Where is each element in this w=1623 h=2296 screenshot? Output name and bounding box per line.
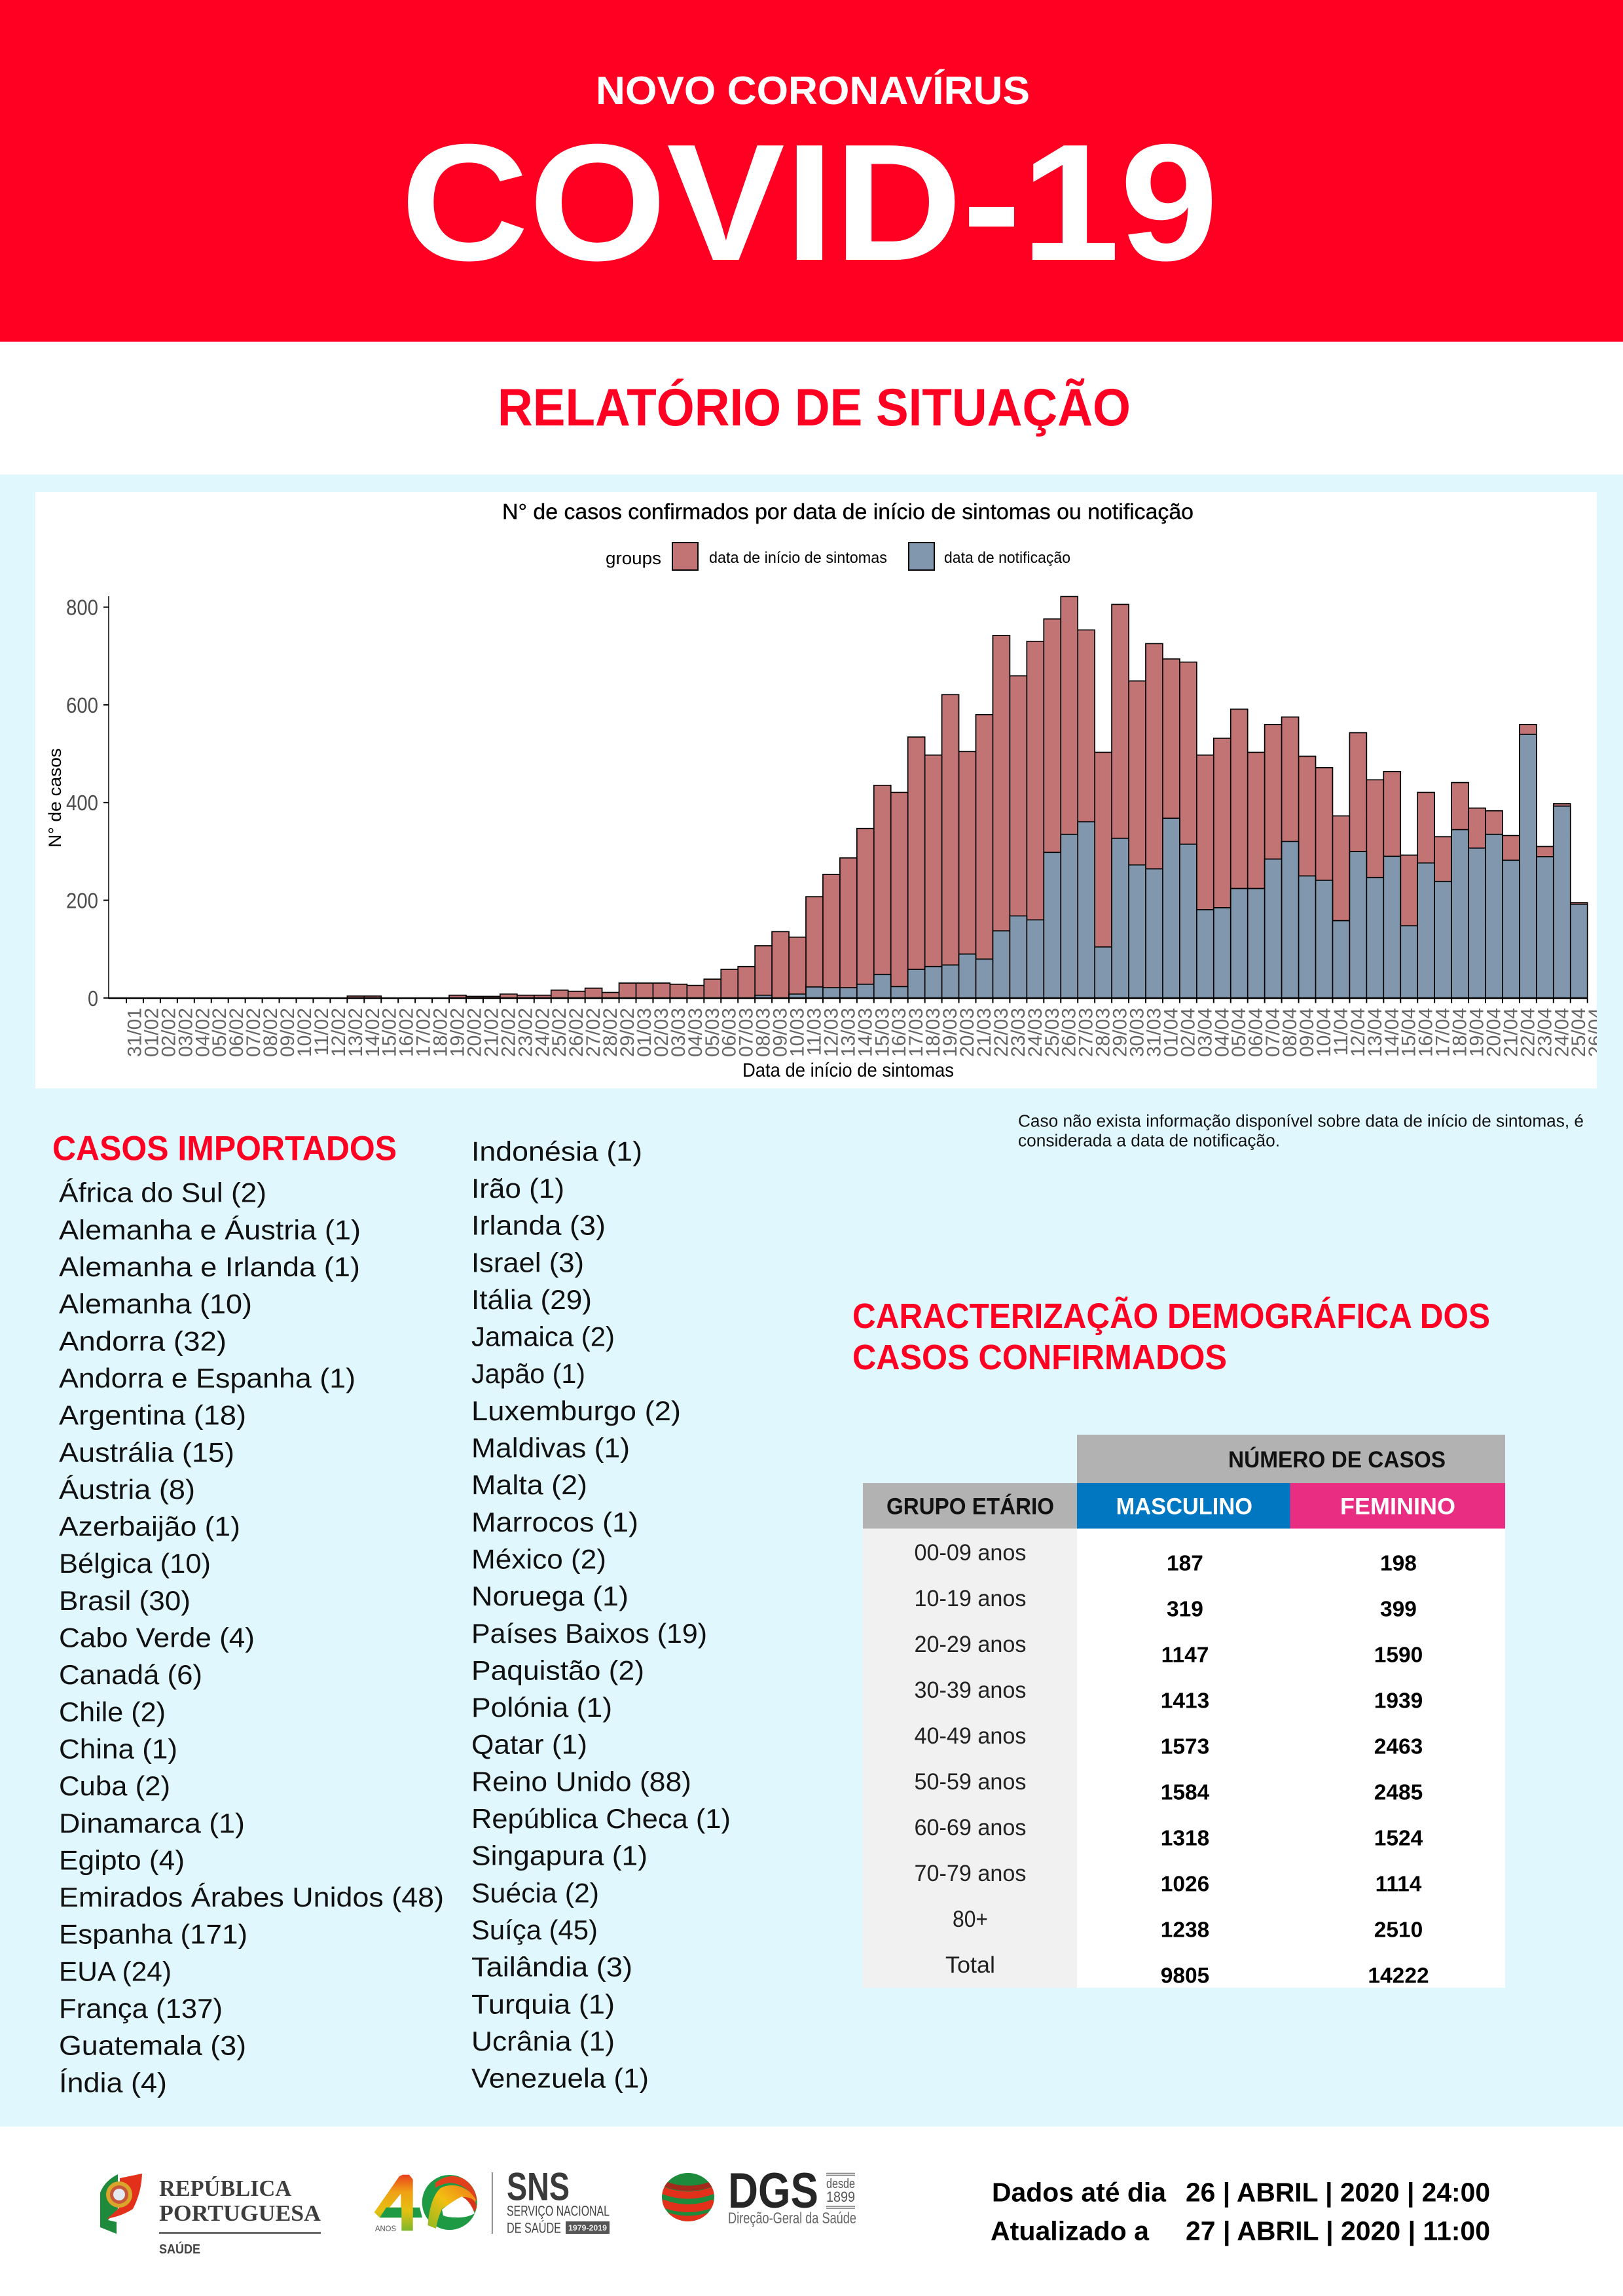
list: imported cases column 1: Bélgica (10) <box>59 1548 211 1579</box>
x axis date labels: 15/04 <box>1398 1008 1420 1057</box>
male case counts: 1318 <box>1161 1827 1209 1851</box>
x axis date labels: 06/02 <box>226 1008 247 1057</box>
footer: data dates <box>991 2177 1490 2246</box>
x axis date labels: 22/02 <box>498 1008 519 1057</box>
age group labels: 70-79 anos <box>914 1861 1027 1886</box>
x axis date labels: 01/02 <box>141 1008 162 1057</box>
x axis date labels: 03/04 <box>1194 1008 1216 1057</box>
axes <box>103 596 1590 1001</box>
bars: data de início de sintomas <box>347 596 1588 998</box>
list: imported cases column 2: Irlanda (3) <box>471 1210 606 1241</box>
list: imported cases column 2: México (2) <box>471 1543 606 1575</box>
age group labels: 10-19 anos <box>914 1586 1027 1611</box>
footnote: considerada a data de notificação. <box>1018 1132 1280 1151</box>
list: imported cases column 2: Maldivas (1) <box>471 1432 630 1463</box>
male case counts: 187 <box>1167 1552 1203 1576</box>
x axis date labels: 26/04 <box>1585 1008 1607 1057</box>
list: imported cases column 2: Ucrânia (1) <box>471 2026 615 2056</box>
female case counts <box>1368 1552 1429 1988</box>
x axis date labels: 16/03 <box>888 1008 910 1057</box>
footer: data dates: Atualizado a <box>991 2215 1150 2246</box>
x axis date labels: 30/03 <box>1127 1008 1148 1057</box>
x axis date labels: 19/02 <box>447 1008 469 1057</box>
page background: light blue band <box>0 475 1623 2126</box>
bars: data de notificação <box>755 734 1588 998</box>
female case counts: 1939 <box>1374 1689 1423 1713</box>
female case counts: 2510 <box>1374 1918 1423 1943</box>
age group labels: 40-49 anos <box>914 1723 1027 1749</box>
x axis date labels: 29/03 <box>1110 1008 1131 1057</box>
x axis date labels: 14/04 <box>1381 1008 1403 1057</box>
list: imported cases column 1: África do Sul (2) <box>59 1177 266 1208</box>
footnote: Caso não exista informação disponível sobre data de início de sintomas, é <box>1018 1113 1584 1131</box>
list: imported cases column 2: Irão (1) <box>471 1173 564 1204</box>
list: imported cases column 2: Japão (1) <box>471 1358 585 1389</box>
list: imported cases column 2: Países Baixos (19) <box>471 1618 707 1649</box>
logo: República Portuguesa: PORTUGUESA <box>159 2200 321 2226</box>
list: imported cases column 1: Alemanha (10) <box>59 1289 252 1319</box>
list: imported cases column 1: Chile (2) <box>59 1696 166 1727</box>
x axis date labels: 10/03 <box>787 1008 809 1057</box>
female case counts: 399 <box>1380 1598 1417 1622</box>
logo: SNS 40 anos: SERVIÇO NACIONAL <box>507 2203 610 2219</box>
male case counts: 319 <box>1167 1598 1203 1622</box>
x axis date labels: 22/04 <box>1517 1008 1539 1057</box>
x axis date labels: 14/03 <box>854 1008 876 1057</box>
list: imported cases column 1: Emirados Árabes Unidos (48) <box>59 1882 444 1912</box>
x axis date labels: 10/02 <box>294 1008 316 1057</box>
header: red banner <box>0 0 1623 342</box>
male case counts: 1238 <box>1161 1918 1209 1943</box>
list: imported cases column 1: Alemanha e Irlanda (1) <box>59 1251 360 1282</box>
male case counts: 1026 <box>1161 1873 1209 1897</box>
list: imported cases column 2: Marrocos (1) <box>471 1507 638 1537</box>
list: imported cases column 2: Tailândia (3) <box>471 1952 632 1982</box>
male case counts: 1413 <box>1161 1689 1209 1713</box>
x axis date labels: 05/02 <box>209 1008 230 1057</box>
x axis date labels: 18/03 <box>922 1008 944 1057</box>
x axis date labels: 11/03 <box>804 1008 825 1056</box>
logo: SNS 40 anos: DE SAÚDE <box>507 2220 561 2236</box>
x axis date labels: 25/03 <box>1042 1008 1063 1057</box>
x axis date labels <box>124 1008 1607 1057</box>
x axis title: Data de início de sintomas <box>742 1060 954 1081</box>
x axis date labels: 11/02 <box>311 1008 333 1056</box>
male case counts: 1147 <box>1161 1643 1209 1668</box>
list: imported cases column 1: França (137) <box>59 1993 223 2024</box>
list: imported cases column 2: Israel (3) <box>471 1247 584 1278</box>
list: imported cases column 2: Paquistão (2) <box>471 1655 644 1685</box>
main title: COVID-19: COVID-19 <box>401 109 1218 295</box>
x axis date labels: 19/04 <box>1467 1008 1488 1057</box>
x axis date labels: 03/03 <box>668 1008 689 1057</box>
female case counts: 198 <box>1380 1552 1417 1576</box>
x axis date labels: 25/02 <box>549 1008 570 1057</box>
female case counts: 14222 <box>1368 1964 1429 1988</box>
y axis title: N° de casos <box>45 748 65 848</box>
female case counts: 2485 <box>1374 1781 1423 1805</box>
chart legend: groups <box>606 548 661 568</box>
x axis date labels: 31/03 <box>1144 1008 1165 1057</box>
age group labels: 30-39 anos <box>914 1677 1027 1703</box>
list: imported cases column 1: Brasil (30) <box>59 1585 191 1616</box>
x axis date labels: 24/04 <box>1551 1008 1573 1057</box>
age group labels <box>914 1540 1027 1978</box>
x axis date labels: 23/03 <box>1008 1008 1029 1057</box>
list: imported cases column 2: Venezuela (1) <box>471 2063 649 2094</box>
list: imported cases column 2: Polónia (1) <box>471 1692 612 1723</box>
y axis labels: 400 <box>66 791 98 815</box>
x axis date labels: 19/03 <box>939 1008 961 1057</box>
y axis labels: 200 <box>66 889 98 912</box>
x axis date labels: 05/04 <box>1228 1008 1250 1057</box>
list: imported cases column 1: Argentina (18) <box>59 1400 246 1431</box>
x axis date labels: 14/02 <box>362 1008 384 1057</box>
x axis date labels: 04/04 <box>1211 1008 1233 1057</box>
list: imported cases column 1: Alemanha e Áustria (1) <box>59 1214 361 1245</box>
list: imported cases column 2 <box>471 1136 731 2094</box>
x axis date labels: 11/04 <box>1330 1008 1352 1056</box>
x axis date labels: 24/03 <box>1025 1008 1046 1057</box>
list: imported cases column 1: Egipto (4) <box>59 1844 185 1875</box>
list: imported cases column 1 <box>59 1177 444 2098</box>
x axis date labels: 02/02 <box>158 1008 179 1057</box>
list: imported cases column 2: Suíça (45) <box>471 1914 598 1945</box>
list: imported cases column 1: China (1) <box>59 1733 177 1765</box>
table: demographic data <box>863 1435 1505 1988</box>
x axis date labels: 17/02 <box>413 1008 435 1057</box>
y axis labels: 600 <box>66 693 98 717</box>
list: imported cases column 2: Malta (2) <box>471 1469 587 1500</box>
chart legend: data de notificação <box>944 549 1070 567</box>
age group labels: 00-09 anos <box>914 1540 1027 1566</box>
x axis date labels: 28/03 <box>1093 1008 1114 1057</box>
x axis date labels: 18/04 <box>1450 1008 1471 1057</box>
panel: epidemic curve chart <box>35 492 1607 1088</box>
x axis date labels: 15/02 <box>379 1008 401 1057</box>
x axis date labels: 28/02 <box>600 1008 621 1057</box>
logo: SNS 40 anos <box>374 2165 610 2236</box>
x axis date labels: 21/03 <box>974 1008 995 1057</box>
x axis date labels: 24/02 <box>532 1008 553 1057</box>
list: imported cases column 1: Espanha (171) <box>59 1919 247 1950</box>
x axis date labels: 29/02 <box>617 1008 638 1057</box>
x axis date labels: 12/03 <box>821 1008 842 1057</box>
male case counts <box>1161 1552 1210 1988</box>
female case counts: 1114 <box>1376 1873 1422 1897</box>
table header row: NÚMERO DE CASOS <box>1228 1446 1446 1473</box>
logo: SNS 40 anos: ANOS <box>375 2224 396 2233</box>
x axis date labels: 16/04 <box>1415 1008 1437 1057</box>
chart legend <box>606 543 1070 570</box>
x axis date labels: 13/04 <box>1364 1008 1386 1057</box>
x axis date labels: 21/02 <box>481 1008 502 1057</box>
x axis date labels: 07/02 <box>243 1008 264 1057</box>
logo: DGS: desde <box>826 2177 855 2191</box>
x axis date labels: 08/02 <box>260 1008 282 1057</box>
x axis date labels: 08/04 <box>1279 1008 1301 1057</box>
x axis date labels: 08/03 <box>753 1008 775 1057</box>
female case counts: 1590 <box>1374 1643 1423 1668</box>
list: imported cases column 1: Andorra (32) <box>59 1325 227 1356</box>
logo: DGS: 1899 <box>826 2189 855 2205</box>
chart legend: data de início de sintomas <box>709 549 887 567</box>
list: imported cases column 2: Indonésia (1) <box>471 1136 642 1166</box>
table header row: MASCULINO <box>1116 1494 1252 1520</box>
male case counts: 9805 <box>1161 1964 1209 1988</box>
y axis labels: 800 <box>66 596 98 620</box>
x axis date labels: 12/04 <box>1347 1008 1369 1057</box>
logo: República Portuguesa: SAÚDE <box>159 2241 200 2257</box>
logo: DGS <box>662 2173 856 2227</box>
age group labels: 20-29 anos <box>914 1632 1027 1657</box>
x axis date labels: 25/04 <box>1568 1008 1590 1057</box>
list: imported cases column 2: Turquia (1) <box>471 1988 615 2019</box>
x axis date labels: 07/03 <box>736 1008 757 1057</box>
logo: DGS: Direção-Geral da Saúde <box>728 2210 856 2227</box>
age group labels: Total <box>945 1952 995 1978</box>
list: imported cases column 1: Austrália (15) <box>59 1437 234 1467</box>
x axis date labels: 31/01 <box>124 1008 145 1057</box>
x axis date labels: 27/03 <box>1076 1008 1097 1057</box>
list: imported cases column 2: Noruega (1) <box>471 1581 629 1611</box>
logo: DGS: DGS <box>728 2163 818 2219</box>
x axis date labels: 09/02 <box>277 1008 299 1057</box>
x axis date labels: 06/03 <box>719 1008 740 1057</box>
logo: República Portuguesa <box>100 2174 321 2257</box>
list: imported cases column 2: Singapura (1) <box>471 1840 647 1871</box>
list: imported cases column 1: Canadá (6) <box>59 1659 202 1690</box>
x axis date labels: 16/02 <box>396 1008 418 1057</box>
list: imported cases column 1: Dinamarca (1) <box>59 1808 245 1839</box>
x axis date labels: 05/03 <box>702 1008 723 1057</box>
x axis date labels: 20/03 <box>957 1008 978 1057</box>
x axis date labels: 02/03 <box>651 1008 672 1057</box>
logo: SNS 40 anos: SNS <box>507 2165 570 2209</box>
x axis date labels: 13/02 <box>345 1008 367 1057</box>
x axis date labels: 26/03 <box>1059 1008 1080 1057</box>
x axis date labels: 01/03 <box>634 1008 655 1057</box>
list: imported cases column 1: Áustria (8) <box>59 1474 195 1505</box>
x axis date labels: 04/02 <box>192 1008 213 1057</box>
x axis date labels: 27/02 <box>583 1008 604 1057</box>
x axis date labels: 21/04 <box>1501 1008 1522 1057</box>
female case counts: 2463 <box>1374 1735 1423 1759</box>
x axis date labels: 17/03 <box>905 1008 927 1057</box>
footer: data dates: 26 | ABRIL | 2020 | 24:00 <box>1186 2177 1490 2207</box>
x axis date labels: 09/03 <box>770 1008 792 1057</box>
list: imported cases column 2: Suécia (2) <box>471 1877 599 1908</box>
list: imported cases column 1: EUA (24) <box>59 1956 172 1986</box>
table header row <box>886 1446 1455 1520</box>
y axis labels <box>66 596 98 1011</box>
heading: caracterização demográfica: CASOS CONFIRMADOS <box>852 1338 1227 1377</box>
list: imported cases column 2: Itália (29) <box>471 1284 592 1315</box>
table header row: GRUPO ETÁRIO <box>886 1494 1054 1520</box>
x axis date labels: 07/04 <box>1262 1008 1284 1057</box>
list: imported cases column 1: Índia (4) <box>59 2067 167 2098</box>
logo: SNS 40 anos: 1979-2019 <box>568 2223 607 2233</box>
x axis date labels: 23/02 <box>515 1008 536 1057</box>
x axis date labels: 04/03 <box>685 1008 706 1057</box>
x axis date labels: 13/03 <box>837 1008 859 1057</box>
x axis date labels: 22/03 <box>991 1008 1012 1057</box>
table header row: FEMININO <box>1340 1494 1455 1520</box>
x axis date labels: 09/04 <box>1296 1008 1318 1057</box>
x axis date labels: 20/04 <box>1484 1008 1504 1057</box>
list: imported cases column 1: Guatemala (3) <box>59 2030 246 2061</box>
male case counts: 1584 <box>1161 1781 1210 1805</box>
y axis labels: 0 <box>88 986 98 1011</box>
list: imported cases column 2: Reino Unido (88) <box>471 1766 691 1797</box>
list: imported cases column 1: Andorra e Espanha (1) <box>59 1363 356 1393</box>
x axis date labels: 23/04 <box>1534 1008 1556 1057</box>
footer: data dates: Dados até dia <box>992 2177 1167 2207</box>
age group labels: 50-59 anos <box>914 1769 1027 1795</box>
list: imported cases column 1: Cabo Verde (4) <box>59 1622 255 1653</box>
footer: data dates: 27 | ABRIL | 2020 | 11:00 <box>1186 2215 1490 2246</box>
x axis date labels: 12/02 <box>328 1008 350 1057</box>
x axis date labels: 17/04 <box>1432 1008 1454 1057</box>
kicker: novo coronavírus: NOVO CORONAVÍRUS <box>596 69 1030 113</box>
heading: casos importados: CASOS IMPORTADOS <box>52 1130 397 1168</box>
age group labels: 60-69 anos <box>914 1815 1027 1840</box>
list: imported cases column 2: Qatar (1) <box>471 1729 587 1760</box>
x axis date labels: 03/02 <box>175 1008 196 1057</box>
x axis date labels: 10/04 <box>1313 1008 1335 1057</box>
x axis date labels: 18/02 <box>430 1008 452 1057</box>
chart title: N° de casos confirmados por data de início de sintomas ou notificação <box>502 499 1194 524</box>
age group labels: 80+ <box>953 1907 988 1932</box>
x axis date labels: 01/04 <box>1161 1008 1182 1057</box>
list: imported cases column 2: Luxemburgo (2) <box>471 1395 681 1426</box>
x axis date labels: 15/03 <box>871 1008 893 1057</box>
subtitle: relatório de situação: RELATÓRIO DE SITUAÇÃO <box>498 378 1131 437</box>
heading: caracterização demográfica: CARACTERIZAÇÃO DEMOGRÁFICA DOS <box>852 1297 1490 1336</box>
list: imported cases column 1: Azerbaijão (1) <box>59 1511 240 1542</box>
male case counts: 1573 <box>1161 1735 1209 1759</box>
list: imported cases column 1: Cuba (2) <box>59 1770 170 1801</box>
list: imported cases column 2: República Checa (1) <box>471 1803 731 1834</box>
heading: caracterização demográfica <box>852 1297 1490 1377</box>
female case counts: 1524 <box>1374 1827 1423 1851</box>
x axis date labels: 06/04 <box>1245 1008 1267 1057</box>
x axis date labels: 26/02 <box>566 1008 587 1057</box>
logo: República Portuguesa: REPÚBLICA <box>159 2175 292 2201</box>
list: imported cases column 2: Jamaica (2) <box>471 1321 615 1352</box>
x axis date labels: 02/04 <box>1177 1008 1199 1057</box>
footnote <box>1018 1113 1584 1151</box>
x axis date labels: 20/02 <box>464 1008 485 1057</box>
